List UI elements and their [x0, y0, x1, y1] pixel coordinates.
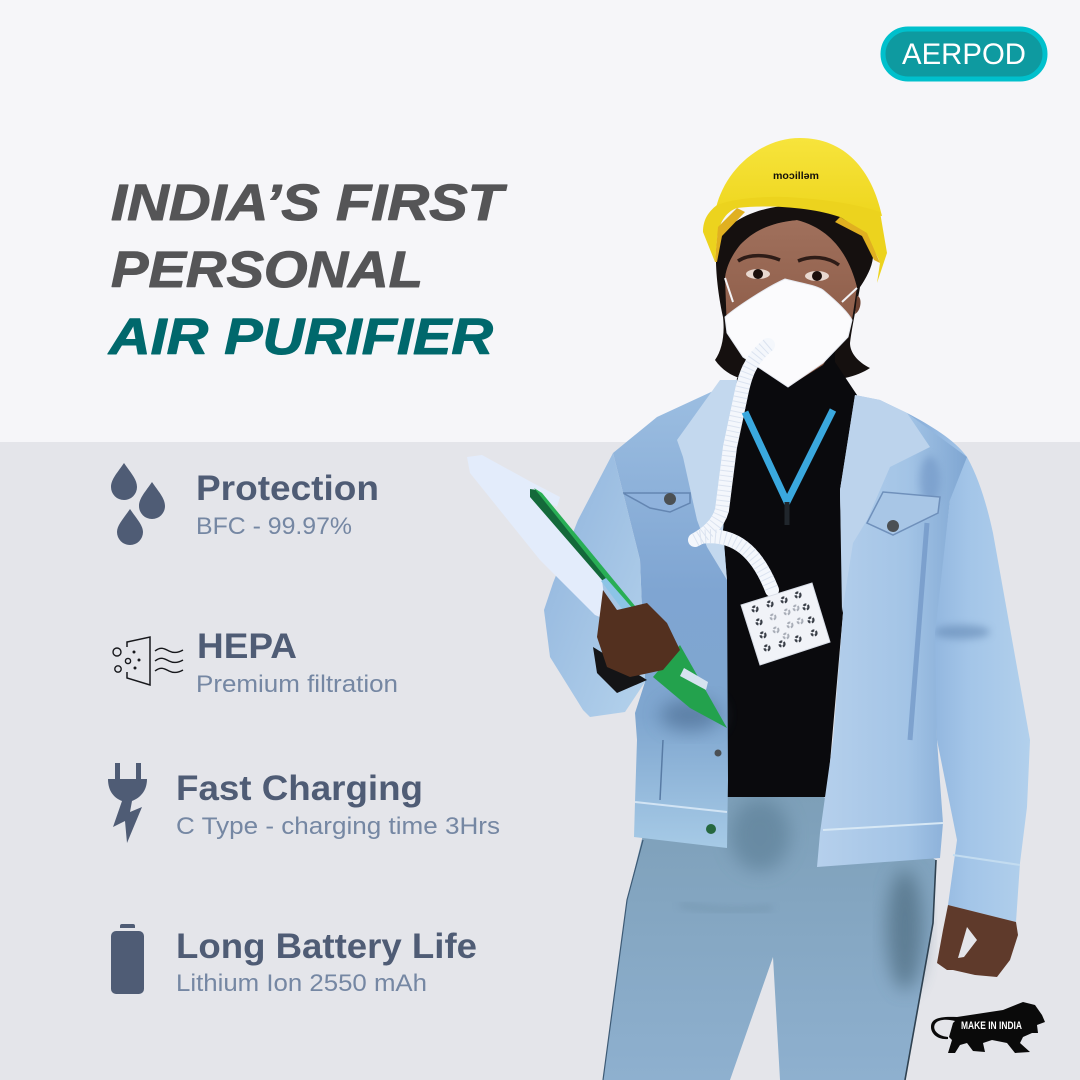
folder: blue tab: [601, 578, 634, 617]
black turtleneck: [720, 362, 857, 797]
jacket: left lapel: [677, 380, 737, 580]
face mask: [725, 279, 852, 387]
person: woman wearing the air purifier: [467, 138, 1030, 1080]
jacket: left front: [613, 380, 737, 848]
jacket: left sleeve: [544, 453, 645, 717]
logo: make in India lion: [931, 1002, 1045, 1053]
feature: long battery life: [111, 924, 477, 997]
title: AIR PURIFIER: [107, 308, 493, 365]
icon: battery: [111, 924, 144, 994]
feature: HEPA: HEPA: [197, 627, 297, 666]
logo: make in India lion: MAKE IN INDIA: [961, 1020, 1022, 1032]
left hand holding folder: [597, 590, 680, 677]
title: PERSONAL: [111, 241, 423, 298]
feature: long battery life: Lithium Ion 2550 mAh: [176, 970, 427, 997]
jacket: right front: [817, 395, 967, 867]
feature: fast charging: C Type - charging time 3Hrs: [176, 813, 500, 840]
jacket: left pocket flap: [623, 493, 690, 512]
purifier device: [741, 583, 830, 665]
feature: protection: Protection: [196, 469, 379, 508]
helmet: moɔilləm: [773, 171, 819, 182]
title: INDIA’S FIRST: [111, 174, 507, 231]
jacket: right pocket flap: [867, 492, 940, 535]
icon: plug with bolt: [108, 763, 147, 843]
right hand: [937, 905, 1018, 977]
folder: paper sheets: [467, 455, 607, 620]
background: lower panel: [0, 442, 1080, 1080]
black cuff: [593, 647, 647, 693]
lanyard: [745, 410, 833, 525]
jeans: [603, 795, 936, 1080]
jacket: right sleeve: [907, 413, 1030, 922]
feature: long battery life: Long Battery Life: [176, 927, 477, 966]
feature: HEPA: Premium filtration: [196, 671, 398, 698]
background: upper panel: [0, 0, 1080, 442]
hair front: [717, 205, 873, 287]
title: [107, 174, 507, 365]
feature: fast charging: Fast Charging: [176, 769, 423, 808]
neck shadow: [750, 345, 835, 395]
face: [725, 220, 857, 387]
feature: protection: BFC - 99.97%: [196, 513, 352, 540]
folder: green cover: [530, 488, 727, 728]
logo: AERPOD badge: [883, 29, 1045, 79]
ear and earring: [855, 296, 861, 314]
hair back: [715, 210, 873, 378]
logo: AERPOD badge: AERPOD: [902, 38, 1026, 71]
jacket: right collar and lapel: [840, 395, 930, 613]
eyebrows and eyes: [738, 256, 839, 281]
breathing tube: [695, 345, 772, 590]
feature: HEPA: [113, 627, 398, 698]
mask straps: [725, 278, 857, 302]
jacket: buttons: [664, 493, 899, 834]
feature: fast charging: [108, 763, 500, 843]
icon: water drops: [111, 463, 165, 545]
feature: protection: [111, 463, 379, 545]
helmet: [703, 138, 887, 283]
icon: air filter: [113, 637, 183, 685]
